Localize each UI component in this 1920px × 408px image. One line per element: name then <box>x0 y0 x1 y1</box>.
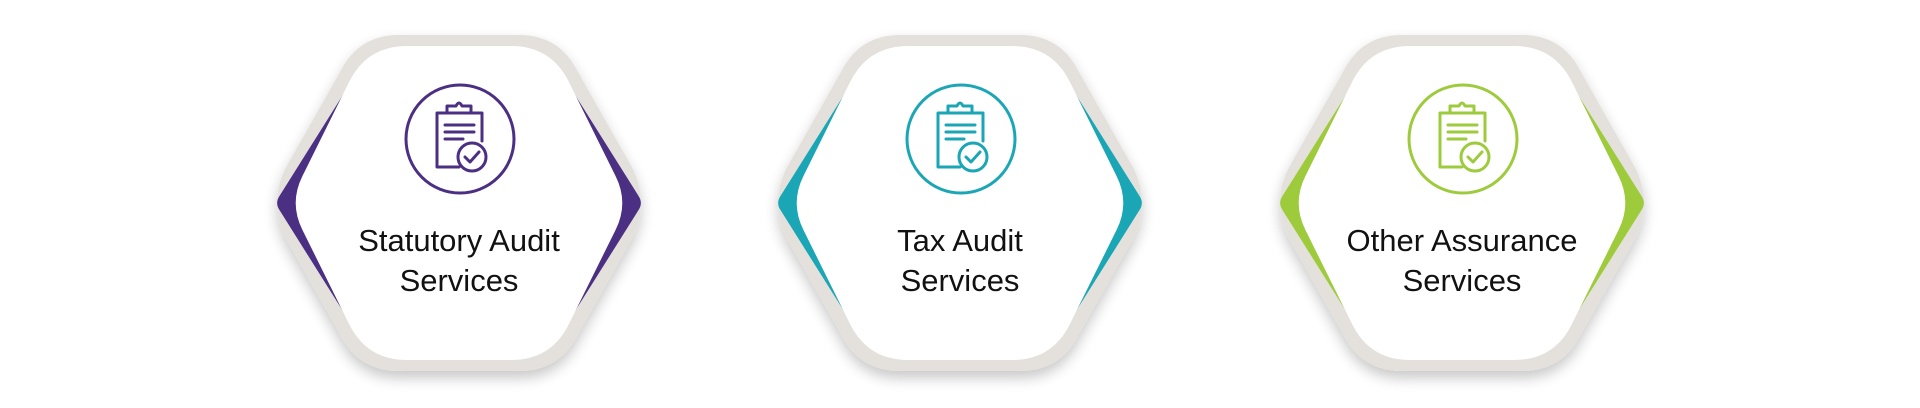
icon: clipboard check <box>406 85 514 193</box>
panel: statutory audit <box>277 35 641 371</box>
text: label <box>358 223 560 298</box>
text: label: Tax Audit <box>897 223 1023 258</box>
panel: tax audit <box>778 35 1142 371</box>
icon: clipboard check <box>1409 85 1517 193</box>
text: label: Services <box>901 263 1019 298</box>
text: label: Services <box>1403 263 1521 298</box>
text: label: Statutory Audit <box>358 223 560 258</box>
text: label: Services <box>400 263 518 298</box>
panel: other assurance <box>1280 35 1644 371</box>
icon: clipboard check <box>907 85 1015 193</box>
text: label: Other Assurance <box>1347 223 1577 258</box>
text: label <box>897 223 1023 298</box>
text: label <box>1347 223 1577 298</box>
